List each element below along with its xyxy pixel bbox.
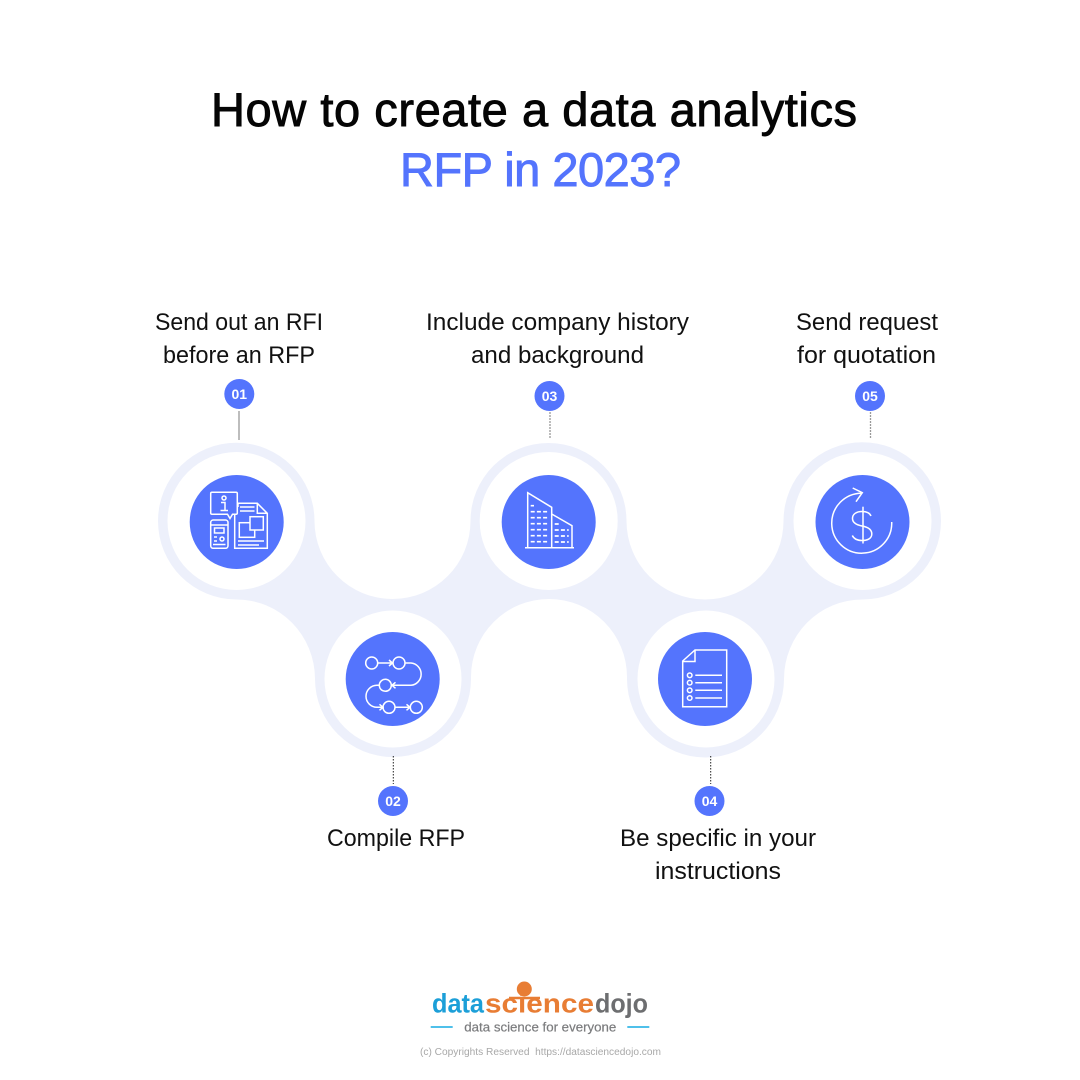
label: step 4: instructions [655,858,781,885]
label: step 1: before an RFP [163,342,315,369]
badge 02: 02 [385,793,401,809]
badge 02 [378,786,408,816]
ribbon connecting the five steps [158,442,941,757]
logo: data science for everyone [464,1020,616,1034]
logo: science [485,988,594,1018]
copyright: (c) Copyrights Reserved https://datasciencedojo.com [420,1047,661,1058]
badge 01: 01 [232,386,247,402]
label: step 3: and background [471,342,644,369]
icon: office buildings [525,493,574,548]
label: step 4 [620,825,816,885]
connector lines [239,411,870,784]
label: step 5 [796,309,938,369]
step 1 node [168,452,306,590]
label: step 1 [155,309,323,369]
step 5 node [794,452,932,590]
badge 04 [694,786,724,816]
badge 05 [855,381,885,411]
label: step 5: Send request [796,309,938,336]
badge 01 [224,379,254,409]
label: step 2: Compile RFP [327,825,465,852]
label: step 1: Send out an RFI [155,309,323,336]
icon: dollar refresh [832,488,892,553]
title: How to create a data analytics [211,83,857,136]
badge 03: 03 [542,388,557,404]
badge 03 [534,381,564,411]
icon: info bubble, phone and document [211,492,267,548]
logo: data [432,988,485,1018]
step 3 node [480,452,618,590]
step 4 node [638,610,774,748]
title: RFP in 2023? [400,143,681,196]
label: step 5: for quotation [797,342,936,369]
badge 04: 04 [702,793,717,809]
label: step 4: Be specific in your [620,825,816,852]
step 2 node [324,610,462,748]
label: step 3 [426,309,689,369]
badge 05: 05 [862,388,878,404]
icon: process flow [366,657,422,713]
icon: document checklist [683,650,727,707]
logo: dojo [595,988,648,1018]
title [211,83,857,196]
logo [431,982,649,1034]
label: step 3: Include company history [426,309,689,336]
